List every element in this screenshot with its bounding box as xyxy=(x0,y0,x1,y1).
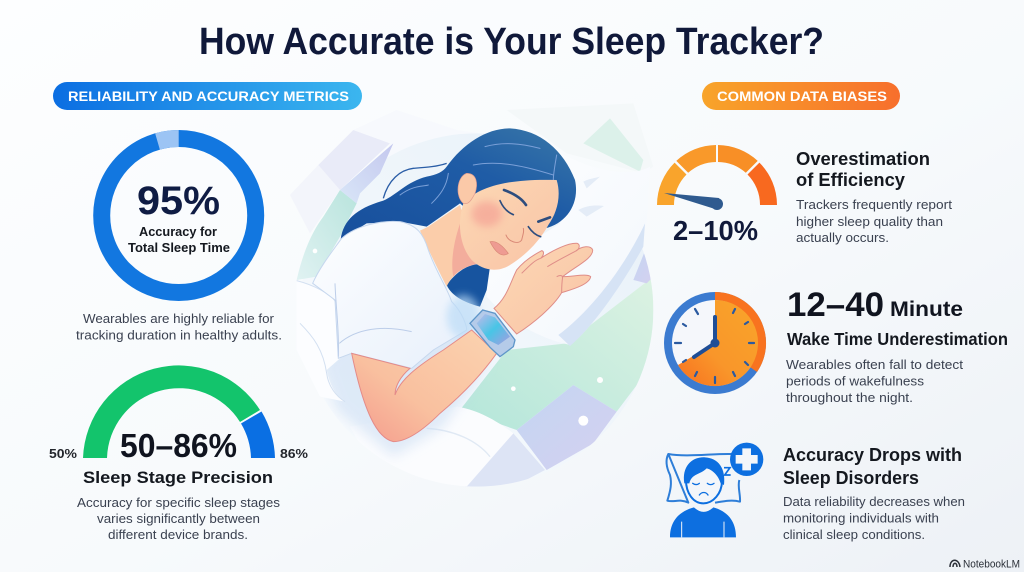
shirt folds xyxy=(335,283,412,357)
icon: clock xyxy=(664,292,766,394)
description xyxy=(796,197,952,245)
face xyxy=(460,180,559,270)
shirt xyxy=(313,221,467,368)
lavender sliver xyxy=(340,143,393,203)
cheek xyxy=(471,201,502,227)
neck shading xyxy=(452,220,477,277)
panel: accuracy drops with sleep disorders xyxy=(666,443,965,542)
pill: reliability and accuracy metrics: RELIABILITY AND ACCURACY METRICS xyxy=(68,89,349,104)
blanket edge xyxy=(297,281,345,402)
gauge value: 50–86% xyxy=(120,427,237,464)
description xyxy=(76,311,282,342)
pill: common data biases xyxy=(702,82,900,110)
hair under neck xyxy=(447,264,490,307)
description: different device brands. xyxy=(108,527,248,542)
hair outline curl xyxy=(383,163,447,198)
hair strands xyxy=(400,144,557,203)
teal crescent xyxy=(297,190,357,280)
heading: Overestimation xyxy=(796,148,930,169)
pillow shadow fold xyxy=(558,223,645,346)
panel: overestimation of efficiency xyxy=(657,145,952,246)
heading: Sleep Stage Precision xyxy=(83,468,273,487)
description: Wearables are highly reliable for xyxy=(83,311,275,326)
value unit: Minute xyxy=(890,298,963,321)
description: actually occurs. xyxy=(796,230,889,245)
arm xyxy=(352,330,497,442)
heading: Wake Time Underestimation xyxy=(787,329,1008,349)
gauge value: 2–10% xyxy=(673,215,758,246)
description: Data reliability decreases when xyxy=(783,494,965,509)
pillow corner xyxy=(578,177,604,217)
finger lines xyxy=(522,251,575,293)
description xyxy=(786,357,963,405)
description: clinical sleep conditions. xyxy=(783,527,925,542)
description: throughout the night. xyxy=(786,390,913,405)
description: periods of wakefulness xyxy=(786,374,925,388)
neck xyxy=(420,205,477,287)
gauge xyxy=(83,365,275,458)
description xyxy=(783,494,965,542)
gauge high label: 86% xyxy=(280,447,308,461)
heading: Accuracy Drops with xyxy=(783,444,962,465)
description xyxy=(77,495,281,542)
pill: common data biases: COMMON DATA BIASES xyxy=(717,89,887,104)
ring caption second line: Total Sleep Time xyxy=(128,241,230,255)
gauge low label: 50% xyxy=(49,447,77,461)
facial features xyxy=(490,190,550,255)
ear xyxy=(458,173,477,204)
illustration backdrop circle xyxy=(300,133,653,487)
ring chart xyxy=(102,138,256,292)
large value: 12–40 xyxy=(787,286,884,324)
description: varies significantly between xyxy=(97,511,260,526)
description: tracking duration in healthy adults. xyxy=(76,328,282,342)
pill: reliability and accuracy metrics xyxy=(53,82,362,110)
backdrop panels xyxy=(290,103,653,233)
description: higher sleep quality than xyxy=(796,214,943,229)
title: How Accurate is Your Sleep Tracker? xyxy=(199,21,824,63)
illustration: sleeping woman with wearable xyxy=(290,103,653,487)
description: Accuracy for specific sleep stages xyxy=(77,495,281,510)
description: Trackers frequently report xyxy=(796,197,952,212)
watermark: NotebookLM: NotebookLM xyxy=(963,558,1020,570)
watch glow xyxy=(447,295,480,338)
smartwatch xyxy=(470,310,515,357)
description: monitoring individuals with xyxy=(783,510,939,526)
icon: sleeper with medical cross xyxy=(666,443,763,537)
heading second line: of Efficiency xyxy=(796,169,906,190)
sparkle dots xyxy=(313,249,603,426)
heading second line: Sleep Disorders xyxy=(783,467,919,488)
panel: sleep stage precision xyxy=(49,365,308,542)
panel: 95% accuracy ring xyxy=(76,138,282,342)
icon: orange gauge xyxy=(657,145,777,210)
hair xyxy=(341,128,576,239)
hand xyxy=(494,243,593,334)
left blanket xyxy=(297,280,345,402)
description: Wearables often fall to detect xyxy=(786,357,963,372)
pillow xyxy=(487,153,650,345)
panel: wake time underestimation xyxy=(664,286,1008,405)
ring value: 95% xyxy=(137,179,220,223)
ring caption: Accuracy for xyxy=(139,225,217,239)
